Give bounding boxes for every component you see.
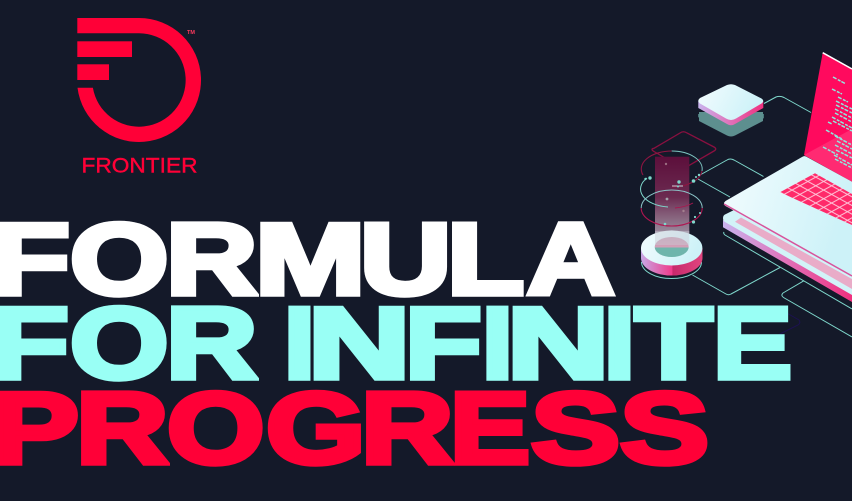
logo wordmark: FRONTIER — [82, 154, 198, 178]
title line: FORMULA: L — [447, 204, 524, 316]
title line: FOR INFINITE: N — [308, 288, 411, 400]
title line: FOR INFINITE: F — [405, 288, 482, 400]
title line: FOR INFINITE: R — [166, 288, 257, 400]
title line: FOR INFINITE: E — [713, 288, 792, 400]
icon: hologram beam with rings — [641, 132, 716, 247]
icon: floating chip — [698, 84, 763, 136]
logo mark — [77, 18, 201, 142]
title line: FOR INFINITE: I — [604, 288, 634, 400]
title line: FOR INFINITE: O — [70, 288, 169, 400]
title line: PROGRESS: O — [167, 373, 265, 485]
title line: PROGRESS: E — [450, 373, 530, 485]
title line: FORMULA: R — [166, 204, 257, 316]
title line: FOR INFINITE: N — [507, 288, 610, 400]
title line: PROGRESS: R — [76, 373, 168, 485]
icon: ring base — [641, 230, 702, 276]
laptop screen — [804, 53, 852, 182]
faint dark diamond behind title — [740, 306, 800, 335]
connector lines — [642, 96, 852, 337]
trademark: TM — [187, 30, 195, 36]
title line: PROGRESS: S — [531, 373, 620, 485]
title line: PROGRESS: G — [266, 373, 366, 485]
title line: PROGRESS: S — [620, 373, 709, 485]
title line: FORMULA: U — [360, 204, 451, 316]
title line: PROGRESS: R — [361, 373, 453, 485]
laptop lower plate — [723, 220, 852, 302]
laptop keyboard — [780, 173, 852, 225]
title line: FORMULA: M — [255, 204, 365, 316]
title line: FOR INFINITE: I — [482, 288, 513, 400]
icon: laptop — [723, 53, 852, 302]
title line: FORMULA: O — [70, 204, 169, 316]
title line: FORMULA: A — [526, 204, 614, 316]
title line: FOR INFINITE: I — [284, 288, 314, 400]
laptop base top — [724, 156, 852, 275]
screen code lines — [823, 77, 852, 168]
title line: FOR INFINITE: T — [635, 288, 712, 400]
